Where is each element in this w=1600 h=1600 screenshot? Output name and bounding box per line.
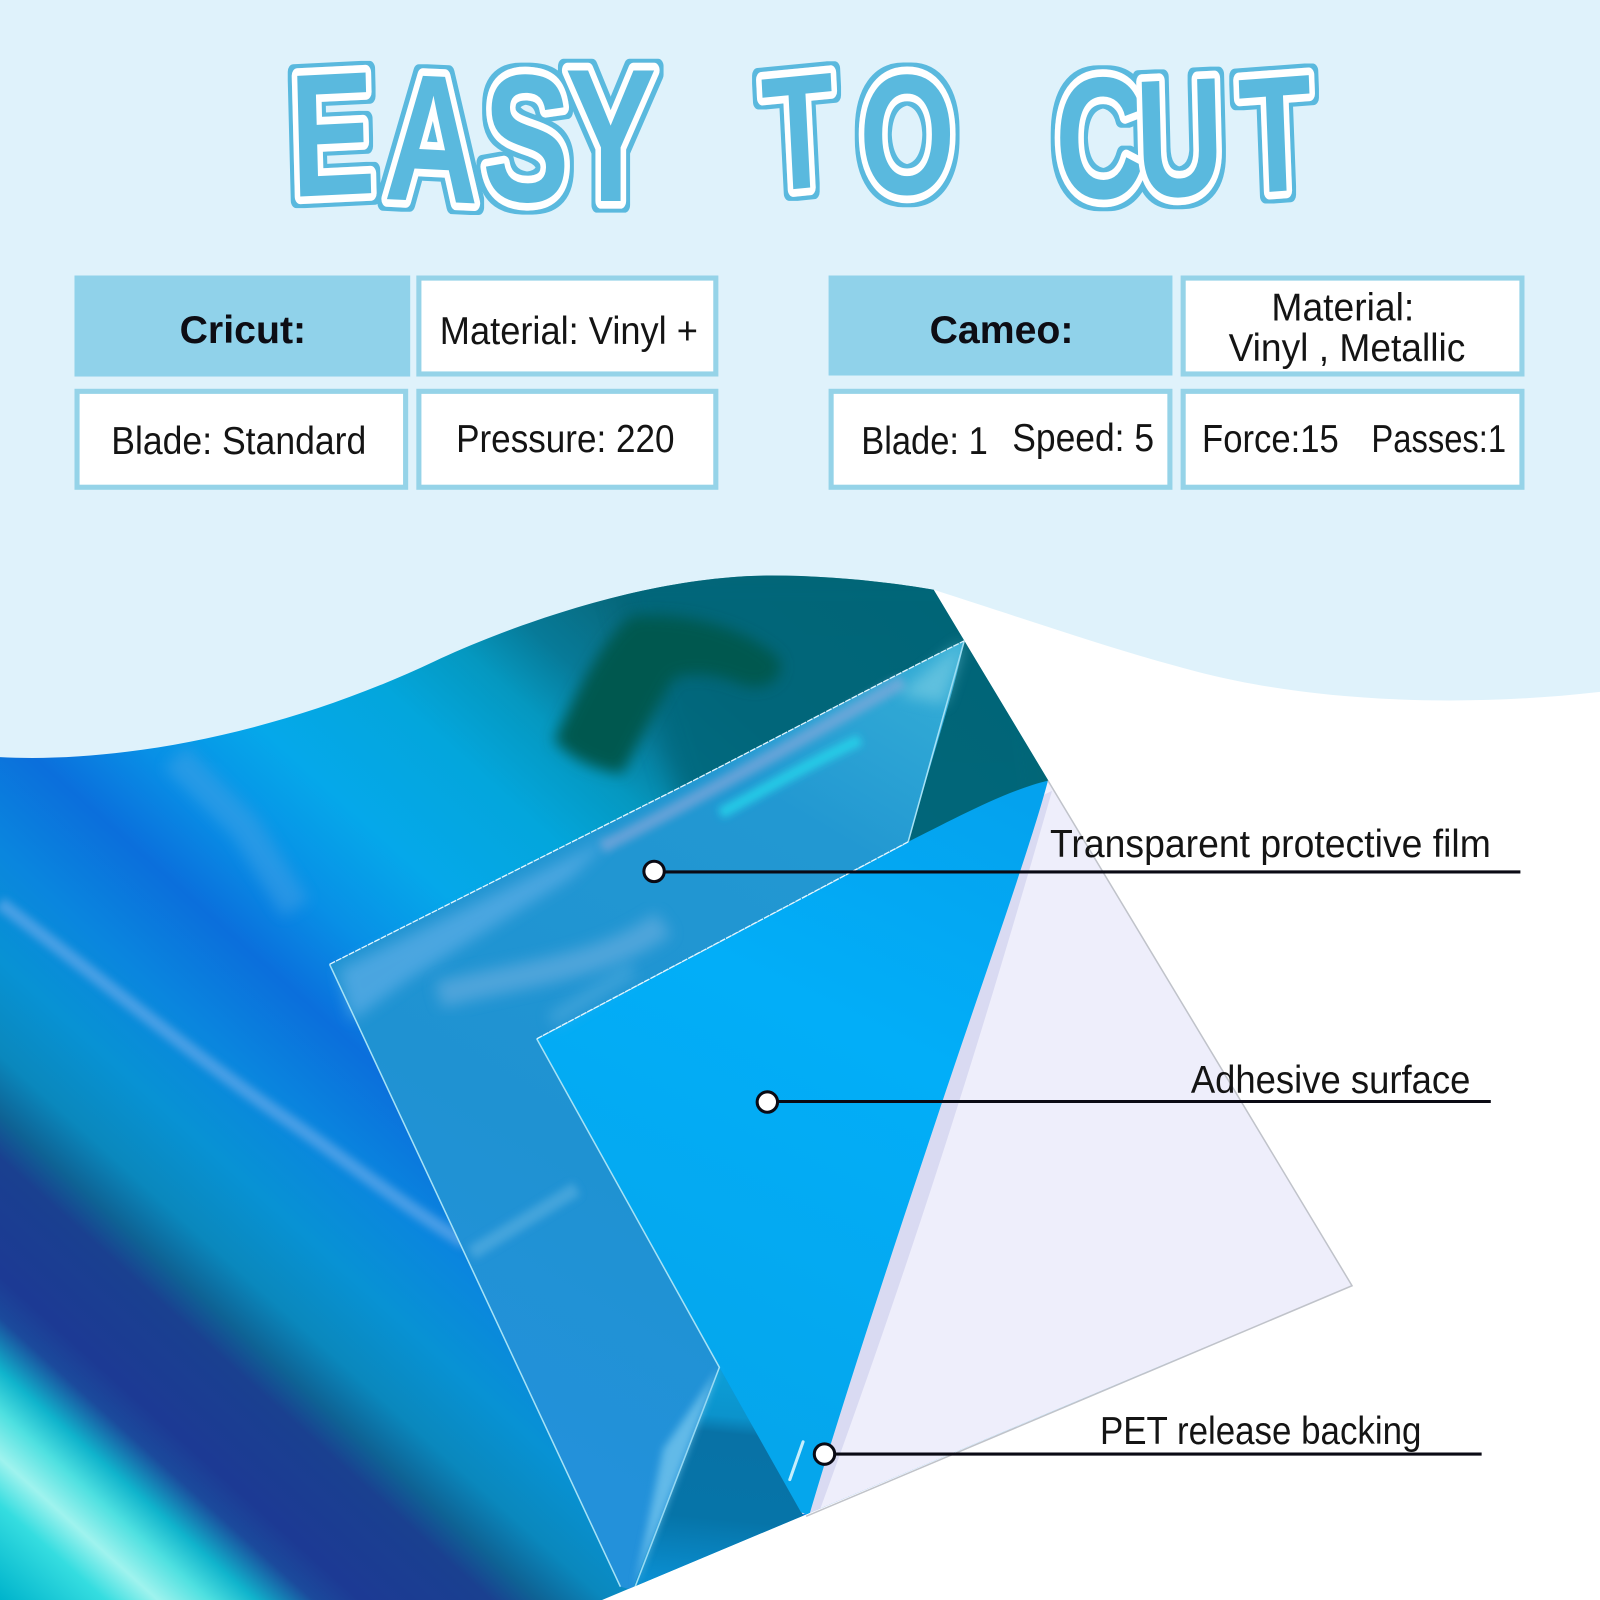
sheet edge xyxy=(806,781,1352,1516)
Cricut header xyxy=(74,276,410,377)
Cameo header xyxy=(829,276,1172,376)
panel: Cricut settings xyxy=(74,276,716,487)
Cameo force and passes xyxy=(1183,391,1522,487)
Cricut material: Material: Vinyl + xyxy=(440,310,698,353)
panel: Cameo settings xyxy=(829,276,1522,487)
title: Y xyxy=(565,30,656,242)
holographic base xyxy=(0,576,1218,1600)
callout: transparent protective film xyxy=(644,823,1520,882)
Cameo force and passes: Force:15 xyxy=(1202,418,1339,461)
title: U xyxy=(1134,42,1226,235)
Cameo material: Material: xyxy=(1271,286,1414,329)
title: E xyxy=(288,36,377,235)
Cameo blade and speed: Speed: 5 xyxy=(1012,417,1154,460)
adhesive surface xyxy=(537,781,1048,1515)
title: C xyxy=(1055,42,1145,236)
Cricut blade xyxy=(77,391,406,487)
Cameo blade and speed: Blade: 1 xyxy=(861,420,988,463)
Cricut material xyxy=(419,278,716,374)
title: A xyxy=(383,35,482,243)
Cameo blade and speed xyxy=(831,391,1170,487)
film edges xyxy=(330,641,964,1588)
title: T xyxy=(759,38,839,227)
film cyan arc xyxy=(720,740,860,813)
film highlight left corner xyxy=(339,837,612,1020)
light streak top xyxy=(176,757,296,908)
backing sheet xyxy=(802,782,1351,1514)
Cameo header: Cameo: xyxy=(930,309,1073,352)
white wave area xyxy=(510,590,1600,1600)
dark triangle under film xyxy=(633,1367,806,1592)
callout: PET release backing xyxy=(814,1410,1482,1464)
Cameo material: Vinyl , Metallic xyxy=(1229,327,1465,370)
callout: transparent protective film: Transparent protective film xyxy=(1050,823,1491,866)
Cricut blade: Blade: Standard xyxy=(111,420,366,463)
Cameo material xyxy=(1183,278,1522,374)
Cricut pressure: Pressure: 220 xyxy=(456,418,674,461)
title: S xyxy=(480,35,573,242)
title: T xyxy=(1236,40,1316,229)
callout: adhesive surface: Adhesive surface xyxy=(1191,1059,1470,1102)
film blurred reflections xyxy=(439,923,663,995)
vinyl sheet photo xyxy=(0,551,1429,1600)
transparent film xyxy=(330,641,964,1590)
Cricut header: Cricut: xyxy=(180,309,306,352)
long light streak xyxy=(0,903,465,1243)
title: O xyxy=(859,39,955,231)
callout: PET release backing: PET release backing xyxy=(1100,1410,1421,1453)
dark green blob xyxy=(554,615,780,773)
callout: adhesive surface xyxy=(757,1059,1491,1112)
film lavender stripe xyxy=(602,682,903,847)
Cricut pressure xyxy=(419,391,716,487)
Cameo force and passes: Passes:1 xyxy=(1371,418,1506,461)
title xyxy=(288,30,1316,243)
teal reflection xyxy=(610,576,1048,919)
